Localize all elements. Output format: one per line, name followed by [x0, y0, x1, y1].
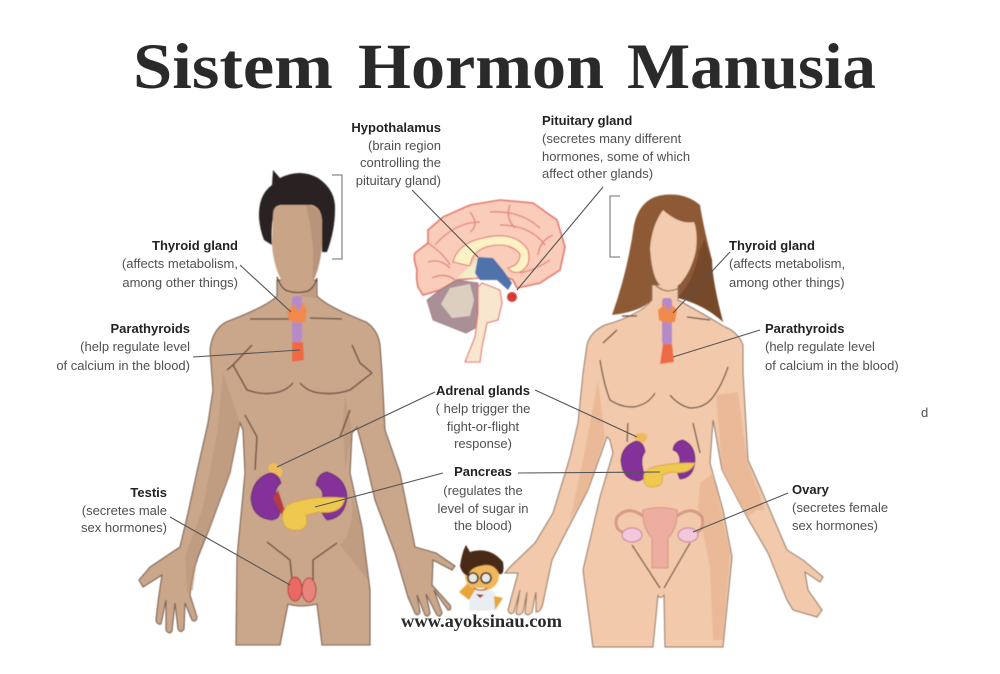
- male pancreas: [282, 497, 345, 530]
- female adrenal: [633, 433, 647, 443]
- male adrenal: [268, 463, 282, 477]
- label: adrenal glands: [436, 383, 530, 451]
- hypothalamus: [475, 257, 512, 290]
- label: hypothalamus: Hypothalamus: [351, 120, 441, 135]
- corpus callosum: [453, 236, 529, 272]
- thalamus: [457, 258, 478, 278]
- label: testis: [81, 485, 167, 535]
- male body lines: [227, 277, 372, 580]
- female body lines: [600, 316, 728, 588]
- label: hypothalamus: [351, 120, 441, 188]
- title: Sistem: [133, 31, 333, 103]
- brackets: [332, 175, 620, 259]
- label: testis: (secretes male: [82, 503, 167, 518]
- title: [133, 31, 876, 103]
- female face: [650, 210, 697, 288]
- label: thyroid gland right: Thyroid gland: [729, 238, 815, 253]
- label: testis: sex hormones): [81, 520, 167, 535]
- label: thyroid gland right: among other things): [729, 275, 845, 290]
- label: ovary: (secretes female: [792, 500, 888, 515]
- label: pituitary gland: Pituitary gland: [542, 113, 632, 128]
- label: pituitary gland: hormones, some of which: [542, 149, 690, 164]
- male face: [272, 205, 322, 292]
- male face shadow: [306, 205, 322, 282]
- website: www.ayoksinau.com: [401, 611, 562, 631]
- male body shading: [185, 282, 368, 593]
- label: adrenal glands: Adrenal glands: [436, 383, 530, 398]
- female hair front: [678, 218, 723, 322]
- uterus and ovaries: [616, 508, 703, 568]
- female body shading: [570, 380, 765, 640]
- label: pituitary gland: affect other glands): [542, 166, 653, 181]
- label: pituitary gland: (secretes many different: [542, 131, 682, 146]
- label: parathyroids left: of calcium in the blood): [56, 358, 190, 373]
- title: Hormon: [358, 31, 604, 103]
- label: pancreas: level of sugar in: [437, 501, 529, 516]
- brain folds: [428, 205, 553, 280]
- label: parathyroids right: of calcium in the blood): [765, 358, 899, 373]
- pituitary gland: [507, 292, 517, 302]
- cerebellum: [427, 280, 478, 333]
- male hair: [259, 170, 335, 252]
- label: hypothalamus: controlling the: [360, 155, 441, 170]
- male renal vessels: [273, 490, 286, 514]
- female kidneys: [621, 440, 695, 481]
- label: thyroid gland left: (affects metabolism,: [122, 256, 238, 271]
- label: hypothalamus: pituitary gland): [356, 173, 441, 188]
- label: parathyroids left: [56, 321, 190, 373]
- label: parathyroids left: Parathyroids: [111, 321, 190, 336]
- label: adrenal glands: response): [454, 436, 512, 451]
- label: parathyroids right: Parathyroids: [765, 321, 844, 336]
- female figure: [505, 194, 823, 647]
- cerebellum detail: [441, 284, 474, 318]
- label: parathyroids right: [765, 321, 899, 373]
- label: ovary: sex hormones): [792, 518, 878, 533]
- label: hypothalamus: (brain region: [368, 138, 441, 153]
- label: adrenal glands: fight-or-flight: [447, 419, 520, 434]
- label: pituitary gland: [542, 113, 690, 181]
- label: parathyroids right: (help regulate level: [765, 339, 875, 354]
- male kidneys: [251, 472, 347, 520]
- male body: [139, 280, 455, 645]
- label: pancreas: Pancreas: [454, 464, 512, 479]
- label: adrenal glands: ( help trigger the: [436, 401, 530, 416]
- label: pancreas: (regulates the: [443, 483, 523, 498]
- label: parathyroids left: (help regulate level: [80, 339, 190, 354]
- male thyroid and trachea: [287, 296, 307, 362]
- label: thyroid gland right: [729, 238, 845, 290]
- label: thyroid gland right: (affects metabolism,: [729, 256, 845, 271]
- female body: [505, 285, 823, 647]
- male testes: [288, 577, 316, 602]
- male figure: [139, 170, 455, 645]
- female pancreas: [644, 463, 695, 487]
- label: ovary: Ovary: [792, 482, 830, 497]
- female neck line: [648, 273, 690, 291]
- title: Manusia: [627, 31, 876, 103]
- label: thyroid gland left: Thyroid gland: [152, 238, 238, 253]
- leader lines: [170, 187, 788, 585]
- stray letter: d: [921, 405, 928, 420]
- brain: [414, 200, 565, 362]
- icon: mascot: [459, 545, 504, 611]
- female hair back: [612, 194, 723, 322]
- cerebrum: [414, 200, 565, 295]
- label: pancreas: [437, 464, 529, 533]
- brainstem: [465, 283, 502, 362]
- label: thyroid gland left: [122, 238, 238, 290]
- female thyroid and trachea: [658, 298, 677, 364]
- label: pancreas: the blood): [454, 518, 512, 533]
- label: ovary: [792, 482, 888, 533]
- label: thyroid gland left: among other things): [122, 275, 238, 290]
- label: testis: Testis: [130, 485, 167, 500]
